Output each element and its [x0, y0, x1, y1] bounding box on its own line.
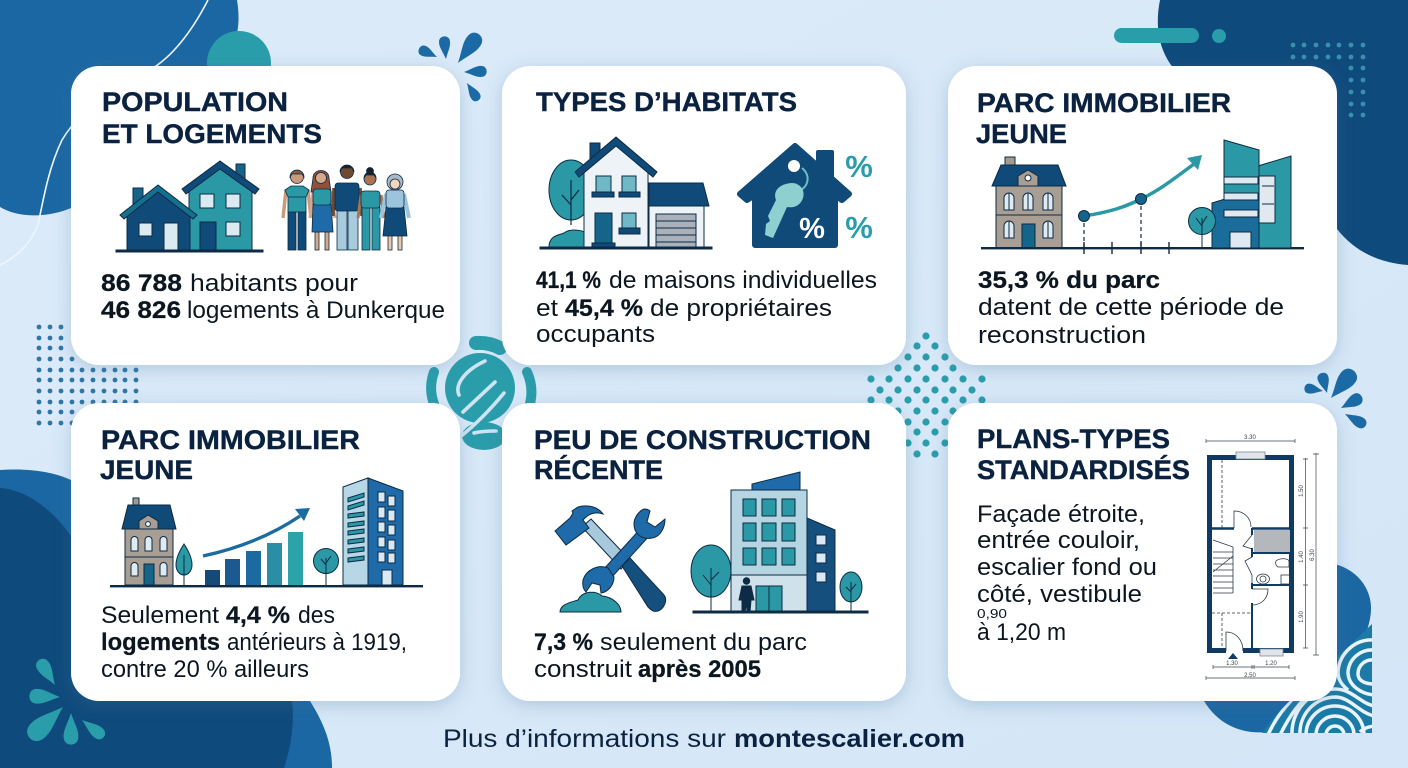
- decoration: left dot grid: [37, 325, 138, 425]
- panel: types d'habitats: [502, 66, 906, 365]
- decoration: bottom-left blue blob: [0, 470, 332, 768]
- heading: [976, 88, 1231, 149]
- stat text: Seulement: [101, 602, 219, 629]
- card background: [502, 66, 906, 365]
- dimension lines: [1206, 439, 1319, 680]
- heading: ET LOGEMENTS: [102, 119, 322, 149]
- icon: five people: [283, 165, 409, 250]
- description text: [977, 501, 1157, 646]
- icon: building with trees and person: [691, 472, 868, 613]
- decoration: teal ornament: [431, 343, 531, 450]
- stat text: habitants pour: [190, 270, 358, 297]
- heading: PEU DE CONSTRUCTION: [534, 425, 871, 455]
- heading: TYPES D’HABITATS: [536, 87, 797, 117]
- stat text: reconstruction: [978, 322, 1146, 349]
- description text: côté, vestibule: [977, 581, 1142, 608]
- heading: [102, 87, 322, 149]
- icon: growth timeline: [981, 155, 1304, 254]
- decoration: top-right blob: [1158, 0, 1408, 265]
- description text: entrée couloir,: [977, 527, 1140, 554]
- icon: house with key and percent signs: [740, 146, 873, 245]
- stat text: de maisons individuelles: [609, 267, 877, 294]
- stat text: occupants: [536, 321, 655, 348]
- stat text: 41,1 %: [536, 267, 601, 294]
- panel: parc immobilier jeune (reconstruction): [948, 66, 1337, 365]
- heading: RÉCENTE: [534, 454, 663, 485]
- footer: [443, 725, 965, 753]
- stat text: 86 788: [101, 270, 182, 297]
- stat text: et: [536, 295, 558, 322]
- dimension labels: 1.30: [1226, 661, 1238, 667]
- icon: hammer and wrench: [555, 506, 666, 612]
- heading: PLANS-TYPES: [977, 424, 1170, 454]
- icon: house with key and percent signs: %: [845, 210, 873, 245]
- card background: [502, 403, 906, 701]
- dimension labels: 2.50: [1244, 673, 1256, 679]
- stat text: 45,4 %: [565, 295, 643, 322]
- stat text: 7,3 %: [534, 629, 593, 656]
- stat text: des: [298, 602, 335, 629]
- card background: [71, 403, 460, 701]
- stat text: datent de cette période de: [978, 294, 1284, 321]
- window and door openings: [1226, 452, 1283, 656]
- decoration: white curve: [0, 0, 208, 265]
- stat text: 46 826: [101, 297, 181, 324]
- decoration: right splash: [1304, 365, 1368, 430]
- stat text: 35,3 % du parc: [978, 267, 1160, 294]
- decoration: top-right dots: [1291, 43, 1365, 117]
- heading: JEUNE: [976, 119, 1067, 149]
- panel: parc immobilier jeune (bars): [71, 403, 460, 701]
- description text: à 1,20 m: [977, 619, 1066, 646]
- decoration: teal dot diamond: [867, 332, 986, 458]
- stat text: après 2005: [638, 656, 761, 683]
- decoration: teal splash: [23, 656, 108, 745]
- heading: [534, 425, 871, 485]
- footer: Plus d’informations sur: [443, 725, 726, 753]
- dimension labels: 1.90: [1299, 611, 1305, 623]
- decoration: teal circle: [207, 31, 271, 95]
- stat text: [101, 602, 407, 683]
- dimension labels: 3.30: [1244, 435, 1256, 441]
- floor plan: [1206, 435, 1319, 680]
- stat text: de propriétaires: [650, 295, 832, 322]
- heading: STANDARDISÉS: [977, 454, 1190, 485]
- stat text: antérieurs à 1919,: [227, 629, 407, 656]
- card background: [948, 403, 1337, 701]
- panel: plans-types standardisés: [948, 403, 1337, 701]
- stat text: construit: [534, 656, 632, 683]
- heading: [100, 425, 360, 485]
- icon: modern building: [1188, 140, 1291, 248]
- icon: detached house with garage: [540, 137, 712, 249]
- description text: Façade étroite,: [977, 501, 1145, 528]
- dimension labels: 1.50: [1299, 485, 1305, 497]
- decoration: bottom-right blob: [1204, 563, 1371, 732]
- description text: 0,90: [977, 606, 1007, 621]
- stat text: [101, 270, 445, 324]
- footer: montescalier.com: [734, 725, 965, 753]
- bar chart with arrow: [203, 508, 310, 585]
- decoration: bottom-left navy blob: [0, 488, 293, 768]
- icon: house with key and percent signs: %: [799, 213, 825, 245]
- decoration: teal dot: [1212, 29, 1226, 43]
- stat text: [536, 267, 877, 348]
- dimension labels: 1.20: [1265, 661, 1277, 667]
- stat text: [978, 267, 1284, 349]
- icon: old house with tree: [122, 498, 192, 585]
- card background: [948, 66, 1337, 365]
- decoration: wave pattern: [1262, 624, 1372, 733]
- icon: two houses: [116, 161, 263, 252]
- icon: tower block: [343, 478, 403, 585]
- stat text: seulement du parc: [600, 629, 807, 656]
- heading: POPULATION: [102, 87, 288, 117]
- stat text: logements: [101, 629, 220, 656]
- heading: PARC IMMOBILIER: [977, 88, 1231, 118]
- heading: PARC IMMOBILIER: [101, 425, 360, 455]
- decoration: top splash: [417, 30, 487, 103]
- decoration: teal pill: [1114, 28, 1199, 43]
- stat text: [534, 629, 807, 683]
- dimension labels: 6.30: [1310, 549, 1316, 561]
- icon: house with key and percent signs: %: [845, 149, 873, 184]
- description text: escalier fond ou: [977, 554, 1157, 581]
- dimension labels: [1226, 435, 1316, 679]
- ground line: [110, 585, 423, 587]
- icon: old house: [992, 157, 1066, 248]
- heading: JEUNE: [100, 455, 193, 485]
- heading: [977, 424, 1190, 485]
- panel: population et logements: [71, 66, 460, 365]
- stat text: logements à Dunkerque: [187, 297, 445, 324]
- panel: peu de construction récente: [502, 403, 906, 701]
- dimension labels: 1.40: [1299, 551, 1305, 563]
- card background: [71, 66, 460, 365]
- stat text: contre 20 % ailleurs: [101, 656, 309, 683]
- stat text: 4,4 %: [226, 602, 290, 629]
- decoration: top-left blob: [0, 0, 239, 215]
- icon: tree: [314, 548, 338, 585]
